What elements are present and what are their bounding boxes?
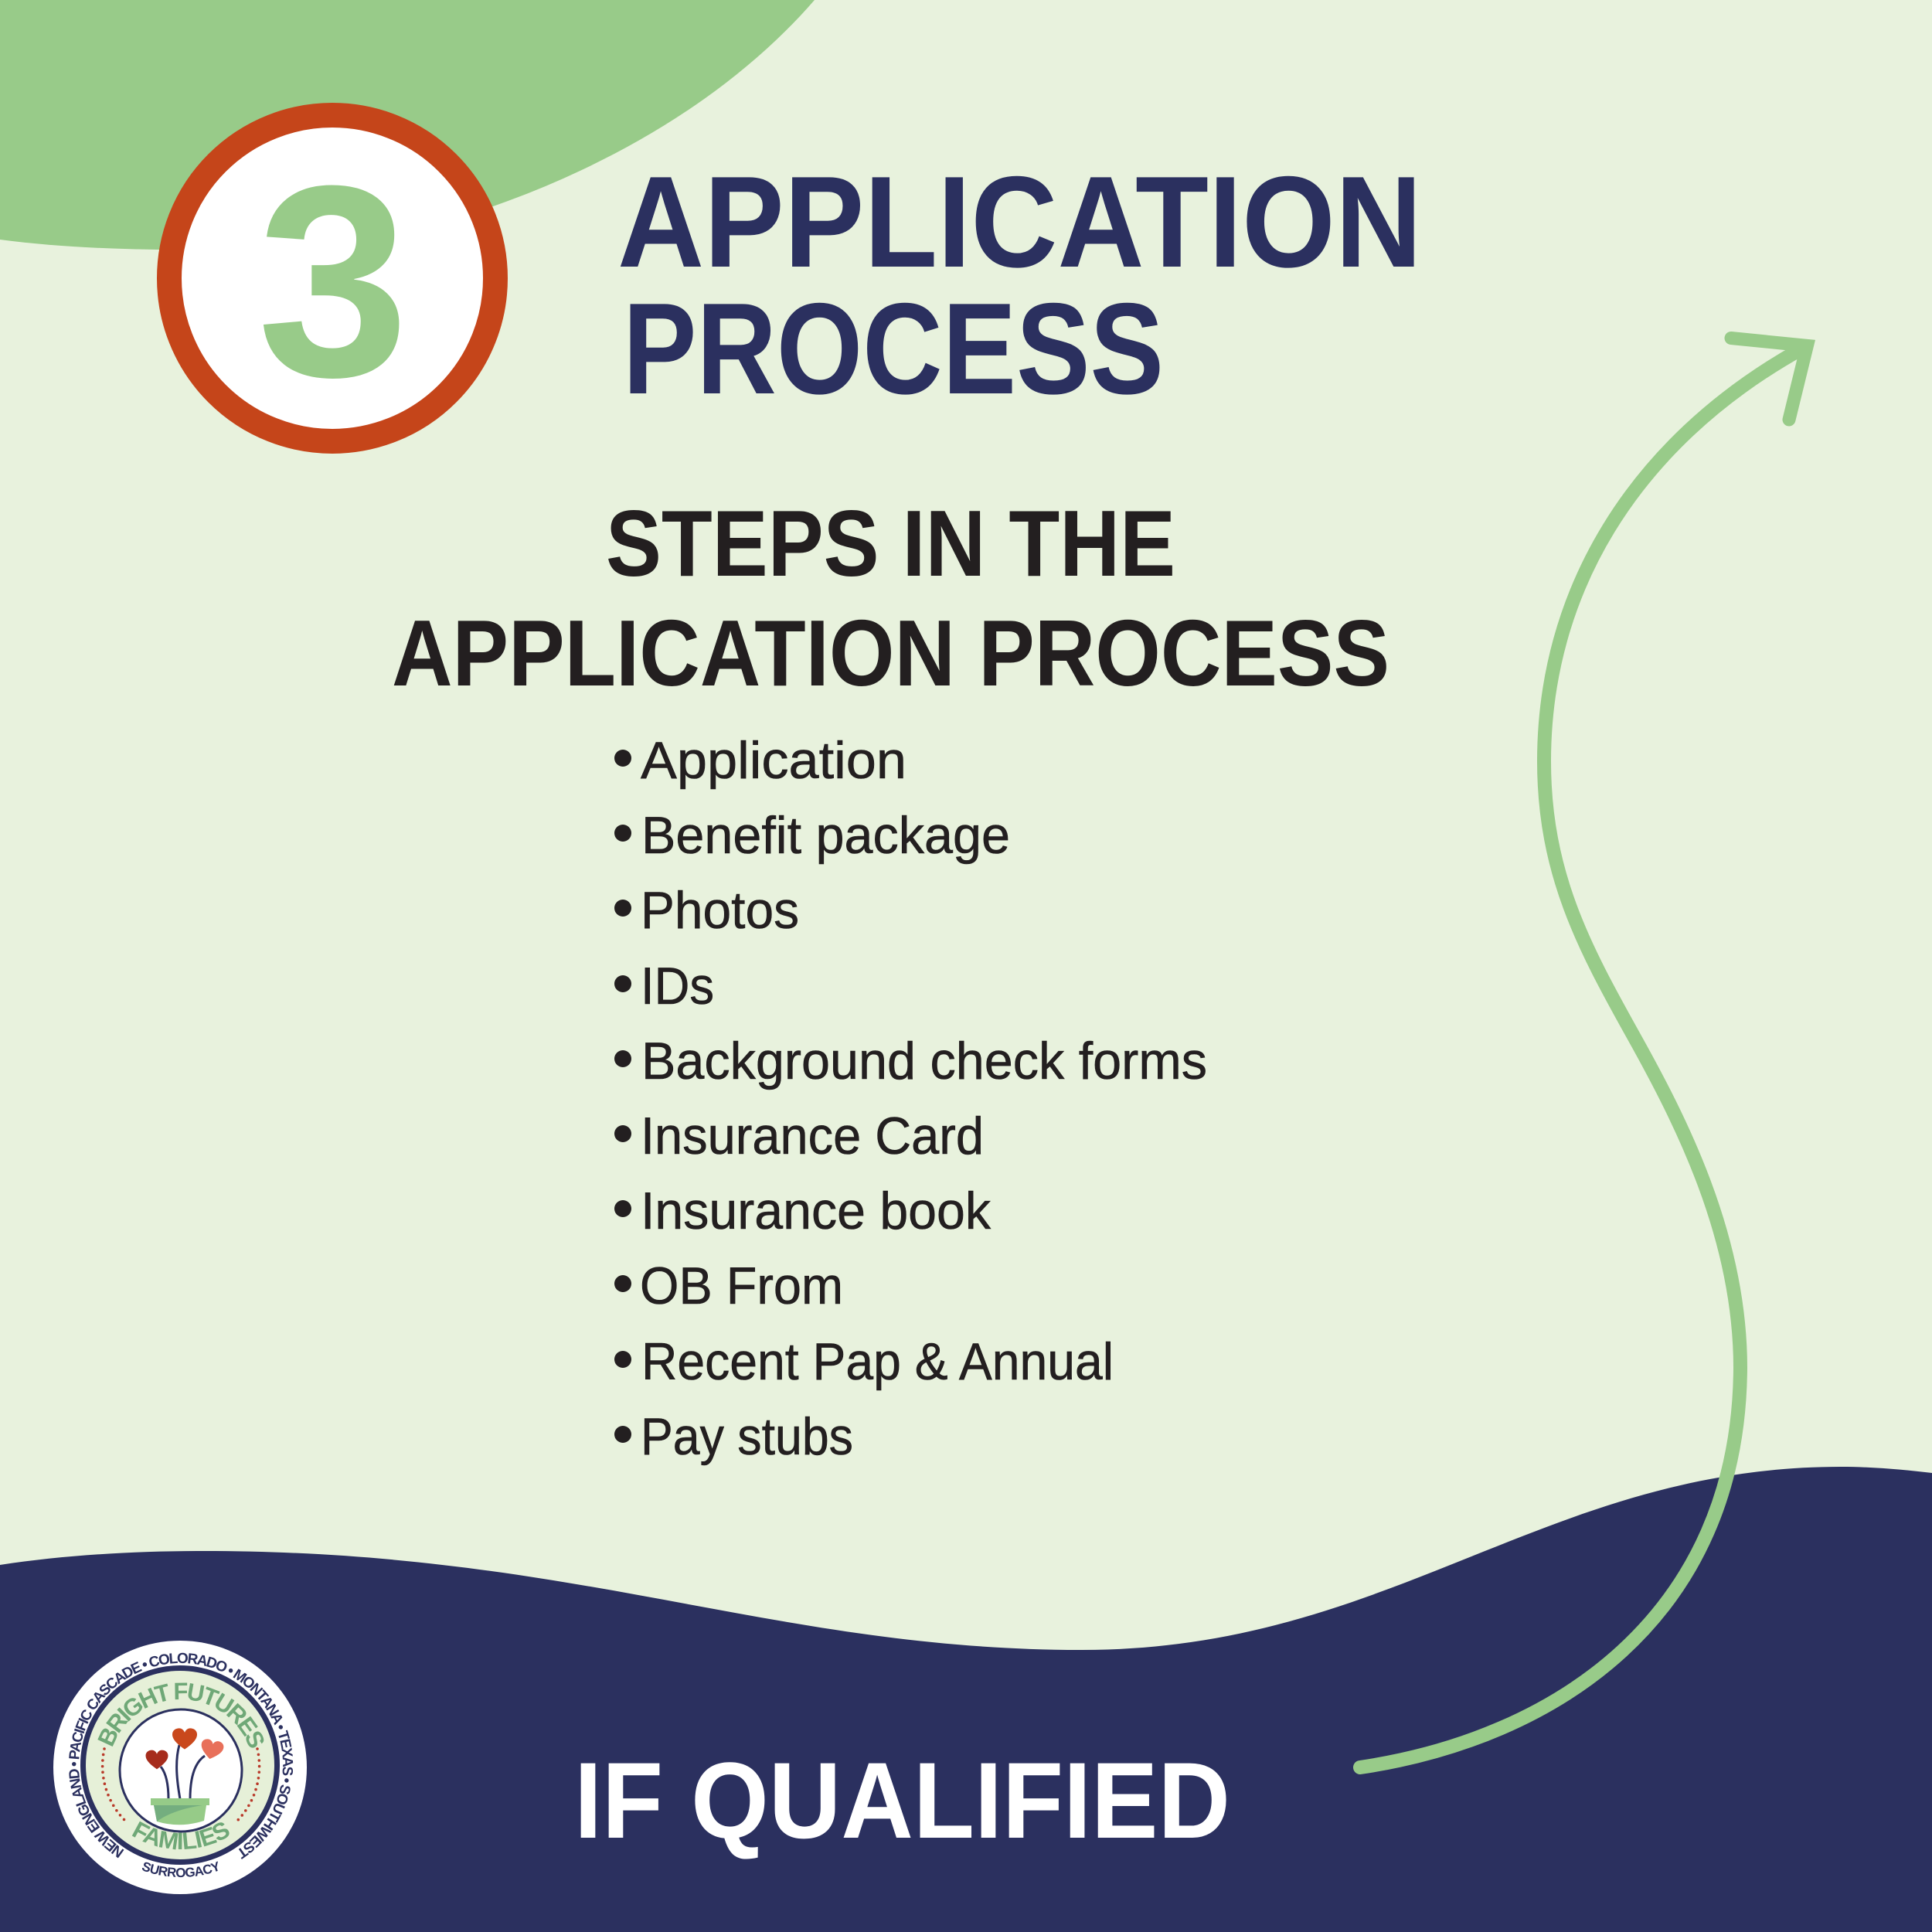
list item: Recent Pap & Annual: Recent Pap & Annual: [641, 1332, 1114, 1391]
list item: Application: Application: [641, 731, 906, 790]
if qualified label: IF QUALIFIED: [574, 1740, 1230, 1861]
logo badge: [53, 1641, 307, 1894]
logo dotted arcs: [103, 1749, 260, 1820]
logo bright futures text: BRIGHT FUTURES: [97, 1683, 264, 1748]
title: [617, 149, 1422, 421]
title: APPLICATION: [617, 149, 1422, 294]
curved arrow: [1360, 338, 1807, 1767]
list item: Insurance Card: Insurance Card: [641, 1107, 984, 1165]
number badge: 3: [257, 128, 409, 434]
logo hearts: [145, 1728, 225, 1769]
list item: IDs: [614, 957, 714, 1015]
logo families text: FAMILIES: [131, 1821, 229, 1850]
list item: Photos: Photos: [641, 881, 799, 940]
logo flower stems: [161, 1745, 205, 1799]
navy wave footer: [0, 1467, 1932, 1932]
logo outer state names: NEW ENGLAND • PACIFIC CASCADE • COLORADO • MONTANA • TEXAS • SOUTHWEST: [69, 1652, 294, 1859]
logo surrogacy text: SURROGACY: [142, 1861, 218, 1878]
title: PROCESS: [623, 276, 1164, 421]
list item: Pay stubs: Pay stubs: [641, 1407, 853, 1466]
logo flower pot: [151, 1798, 209, 1825]
list item: Background check forms: Background check forms: [641, 1032, 1207, 1090]
green corner blob: [0, 0, 815, 250]
list item: Benefit package: Benefit package: [641, 806, 1010, 865]
subheading: STEPS IN THE: [606, 491, 1175, 596]
number badge: [169, 115, 495, 441]
subheading: APPLICATION PROCESS: [392, 600, 1389, 706]
list item: OB From: OB From: [640, 1257, 843, 1315]
list item: Insurance book: Insurance book: [641, 1182, 992, 1240]
subheading: [392, 491, 1389, 706]
list item: IDs: IDs: [641, 957, 714, 1015]
checklist: [614, 731, 1207, 1466]
